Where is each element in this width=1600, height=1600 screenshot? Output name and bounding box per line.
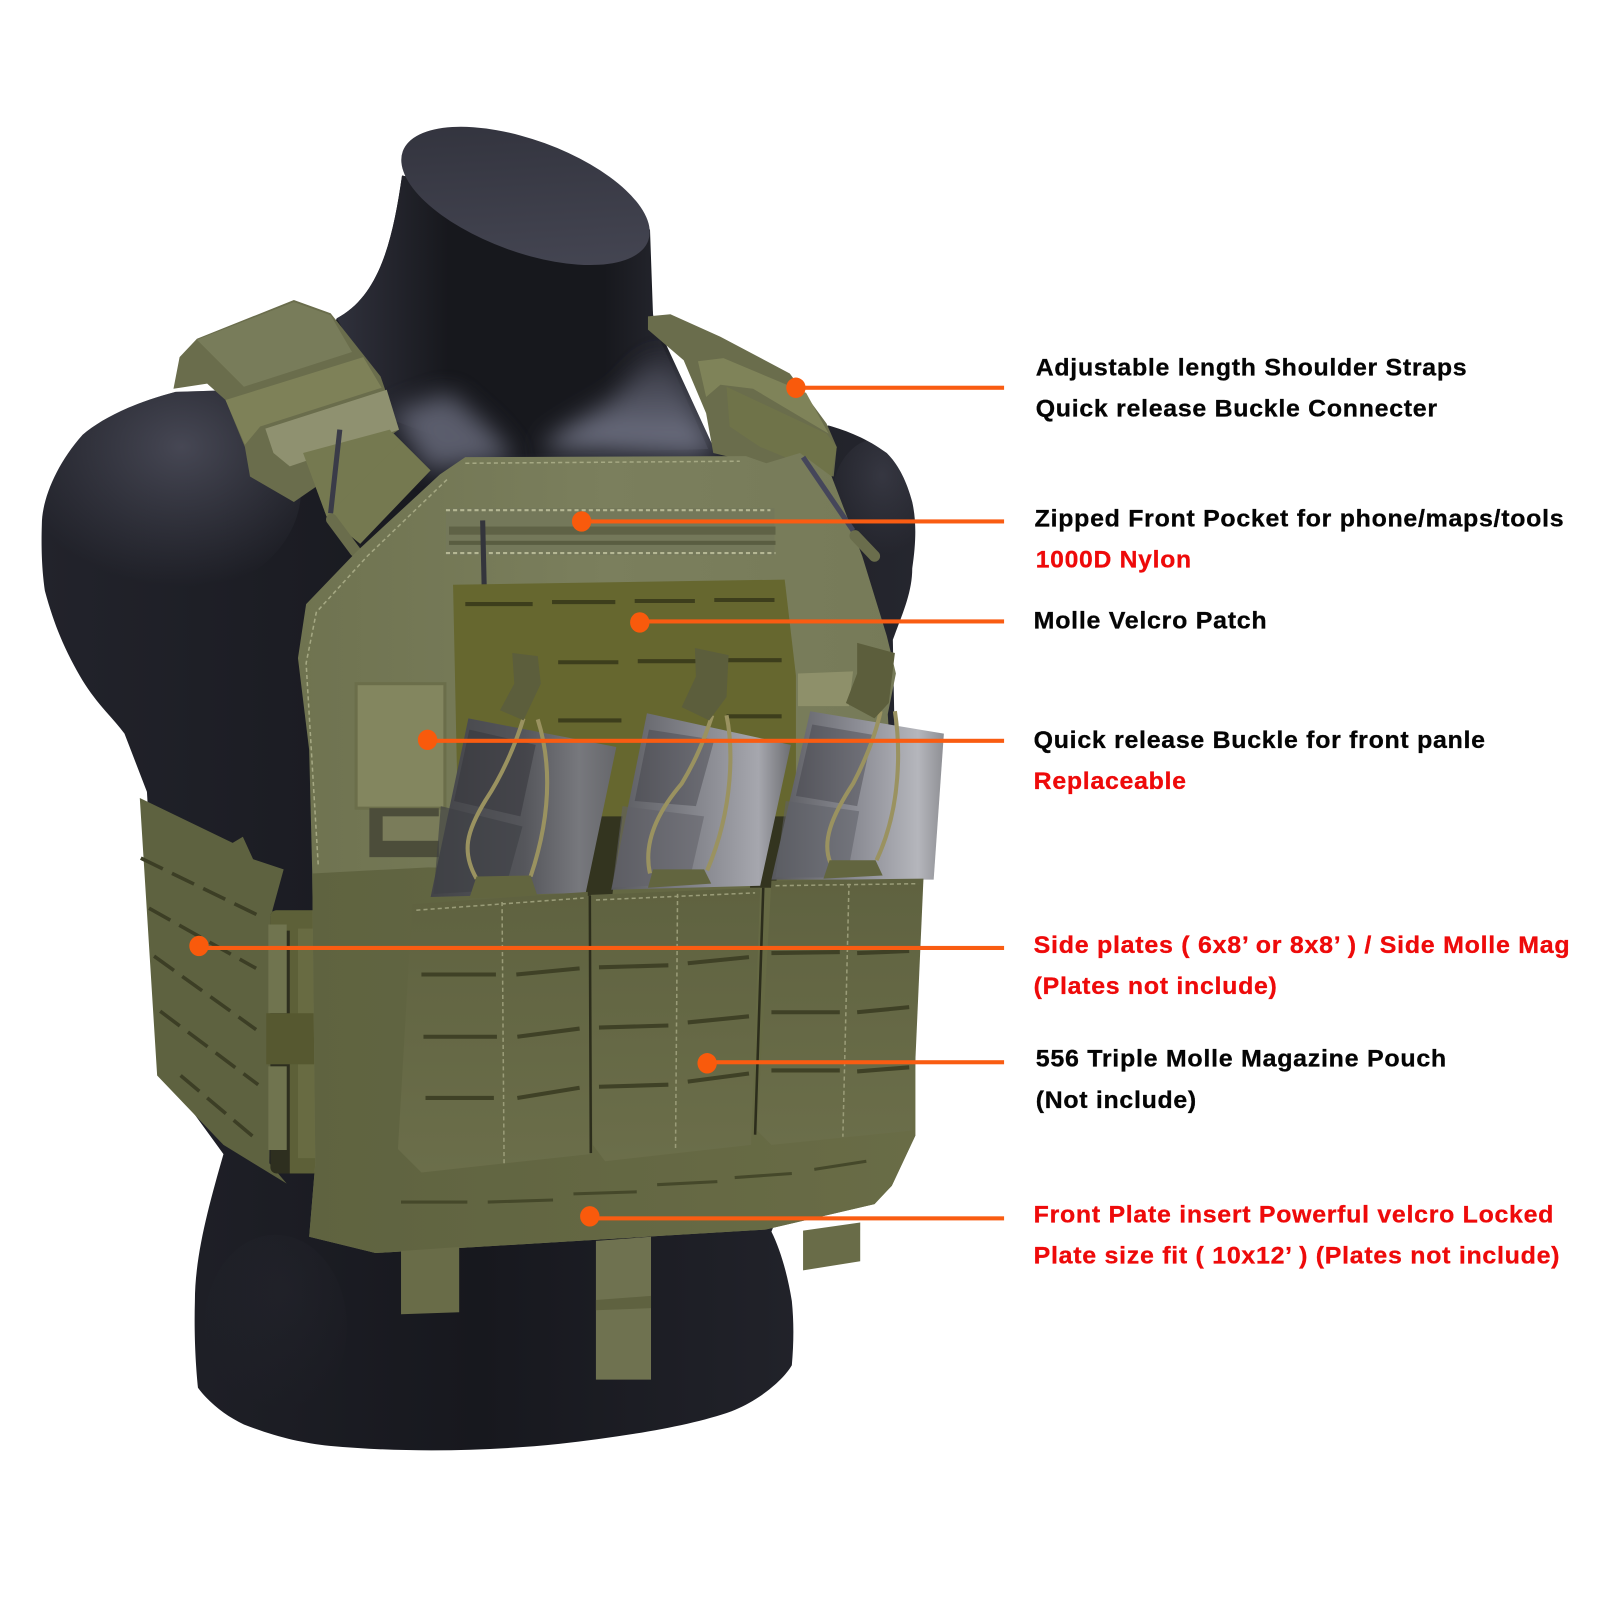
chest highlight left bbox=[393, 393, 515, 470]
buckle left bands bbox=[268, 924, 287, 1013]
bungee cord bbox=[331, 430, 340, 513]
lower panel bbox=[309, 867, 915, 1253]
buckle knot bbox=[342, 1173, 352, 1194]
callout: front buckle bbox=[418, 730, 1004, 750]
elastic loops bbox=[468, 711, 898, 879]
right shoulder sheen bbox=[848, 441, 910, 519]
body highlights, clipped to the silhouette bbox=[54, 316, 911, 1253]
dark gaps behind magazines bbox=[571, 816, 786, 896]
lower torso sheen bbox=[204, 1235, 347, 1418]
label: front plate: Front Plate insert Powerful velcro Locked bbox=[1034, 1201, 1554, 1228]
quick release patch bbox=[356, 684, 445, 857]
callout: shoulder straps bbox=[786, 378, 1004, 398]
mannequin neck bbox=[337, 176, 708, 454]
pad band bbox=[226, 357, 382, 445]
buckle top piece bbox=[270, 910, 353, 931]
mannequin bbox=[36, 99, 923, 1450]
right band bbox=[698, 358, 829, 434]
label: front buckle bbox=[1034, 727, 1486, 795]
mannequin torso bbox=[42, 176, 915, 1450]
right shoulder strap bbox=[648, 314, 837, 477]
label: front buckle: Replaceable bbox=[1034, 768, 1187, 795]
buckle middle tab bbox=[266, 1013, 340, 1064]
right cord bbox=[803, 457, 853, 531]
label: velcro patch: Molle Velcro Patch bbox=[1034, 608, 1267, 635]
callout: velcro patch bbox=[630, 612, 1004, 633]
callout: magazine pouch bbox=[697, 1053, 1004, 1073]
magazine 3 bbox=[771, 711, 944, 880]
magazine 2 bbox=[611, 713, 791, 890]
label: front plate: Plate size fit ( 10x12’ ) (Plates not include) bbox=[1034, 1242, 1560, 1269]
label: magazine pouch: (Not include) bbox=[1036, 1087, 1197, 1114]
head top bbox=[384, 99, 667, 293]
pouch 1 bbox=[398, 876, 590, 1172]
buckle right bands bbox=[337, 932, 357, 1020]
tab 1 bbox=[500, 653, 541, 720]
callout lines bbox=[189, 378, 1004, 1227]
magazines bbox=[431, 711, 944, 897]
metal slider bbox=[369, 808, 439, 857]
velcro patch bbox=[453, 580, 853, 878]
callout: side plates bbox=[189, 936, 1004, 956]
label: zipped pocket: Zipped Front Pocket for phone/maps/tools bbox=[1035, 506, 1564, 533]
zipped pocket bbox=[446, 508, 776, 665]
pouch 2 bbox=[591, 869, 760, 1161]
right buckle bbox=[727, 387, 837, 477]
label: zipped pocket bbox=[1035, 506, 1564, 573]
strap lower webbing bbox=[303, 430, 431, 544]
shoulder pad bbox=[173, 300, 399, 502]
pouch 3 bbox=[757, 860, 923, 1145]
label: shoulder straps: Adjustable length Shoulder Straps bbox=[1036, 355, 1467, 382]
magazine 1 bbox=[431, 718, 616, 897]
cord knot bbox=[332, 519, 355, 551]
label: zipped pocket: 1000D Nylon bbox=[1036, 546, 1192, 573]
bottom straps bbox=[401, 1222, 860, 1380]
side plate laser slots bbox=[141, 858, 258, 1141]
buckle bbox=[265, 390, 399, 466]
dark gaps between pouches bbox=[590, 888, 763, 1153]
buckle centre column bbox=[290, 913, 331, 1173]
lower panel slots bbox=[401, 1161, 866, 1202]
label: magazine pouch: 556 Triple Molle Magazine Pouch bbox=[1036, 1045, 1447, 1072]
chest highlight right bbox=[541, 357, 714, 454]
buckle cord bbox=[327, 1066, 350, 1166]
label: magazine pouch bbox=[1036, 1045, 1447, 1114]
pouch shock-cord tabs bbox=[500, 643, 895, 720]
label: front buckle: Quick release Buckle for front panle bbox=[1034, 727, 1486, 754]
pad flap bbox=[197, 302, 352, 387]
left shoulder sheen bbox=[54, 390, 300, 558]
front panel bbox=[298, 453, 915, 1253]
right knot bbox=[855, 536, 874, 556]
panel stitching bbox=[306, 461, 740, 867]
side plate panel bbox=[140, 798, 287, 1184]
right webbing patch bbox=[798, 671, 853, 706]
label: shoulder straps: Quick release Buckle Connecter bbox=[1036, 395, 1438, 422]
callout: zipped pocket bbox=[572, 511, 1004, 532]
label: side plates: (Plates not include) bbox=[1034, 973, 1278, 1000]
strap over buckle bbox=[303, 430, 400, 516]
label: shoulder straps bbox=[1036, 355, 1467, 422]
label: front plate bbox=[1034, 1201, 1560, 1269]
side quick release buckle bbox=[266, 910, 360, 1194]
label: side plates: Side plates ( 6x8’ or 8x8’ ) / Side Molle Mag bbox=[1034, 932, 1570, 959]
left shoulder strap bbox=[173, 300, 431, 551]
label: side plates bbox=[1034, 932, 1570, 1000]
tab 3 bbox=[846, 643, 895, 718]
tab 2 bbox=[682, 648, 729, 720]
triple magazine pouch bbox=[398, 860, 923, 1172]
callout: front plate bbox=[580, 1206, 1004, 1227]
